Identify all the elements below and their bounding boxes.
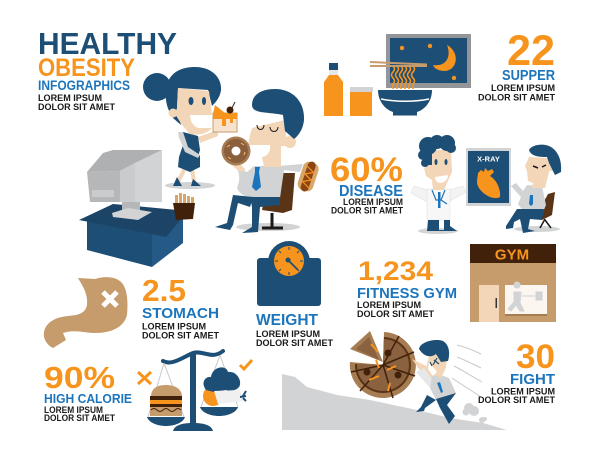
stat: supper: DOLOR SIT AMET bbox=[478, 92, 555, 104]
icon: pizza bbox=[350, 331, 416, 398]
stat: stomach: LOREM IPSUM bbox=[142, 322, 206, 332]
stat: fight: FIGHT bbox=[510, 371, 555, 388]
stat: weight: WEIGHT bbox=[256, 312, 319, 329]
stat: high calorie bbox=[44, 360, 132, 423]
stat: fight: 30 bbox=[516, 338, 555, 376]
x-ray panel bbox=[466, 148, 511, 206]
stat: supper bbox=[478, 27, 555, 104]
stat: disease: 60% bbox=[330, 151, 403, 189]
illustration: patient bbox=[506, 145, 561, 233]
icon: cake bbox=[213, 102, 237, 132]
icon: burger bbox=[150, 385, 182, 416]
stat: disease: DISEASE bbox=[339, 183, 403, 200]
stat: disease: LOREM IPSUM bbox=[343, 197, 403, 207]
stat: high calorie: HIGH CALORIE bbox=[44, 391, 132, 406]
icon: vegetables and fish bbox=[203, 367, 246, 406]
stat: fitness gym: DOLOR SIT AMET bbox=[357, 309, 434, 320]
stat: stomach bbox=[142, 273, 219, 342]
illustration: woman with cake bbox=[143, 67, 221, 189]
stat: stomach: 2.5 bbox=[142, 273, 186, 308]
speed lines bbox=[452, 345, 482, 397]
stat: stomach: STOMACH bbox=[142, 305, 219, 322]
icon: balance scale bbox=[138, 351, 252, 431]
stat: supper: 22 bbox=[507, 27, 555, 75]
stat: weight bbox=[256, 312, 333, 349]
title block: OBESITY bbox=[38, 54, 135, 82]
title block: LOREM IPSUM bbox=[38, 93, 102, 104]
stat: fitness gym: 1,234 bbox=[358, 256, 433, 286]
stat: supper: SUPPER bbox=[502, 67, 555, 84]
icon: gym building: GYM bbox=[495, 246, 529, 264]
stat: fitness gym: LOREM IPSUM bbox=[357, 300, 421, 311]
stat: weight: DOLOR SIT AMET bbox=[256, 338, 333, 349]
stat: high calorie: DOLOR SIT AMET bbox=[44, 413, 116, 423]
title block: DOLOR SIT AMET bbox=[38, 102, 115, 113]
x-ray panel: X-RAY bbox=[477, 154, 500, 164]
icon: gym building bbox=[470, 244, 556, 322]
icon: donut bbox=[222, 136, 250, 166]
stat: stomach: DOLOR SIT AMET bbox=[142, 330, 219, 342]
stat: fight bbox=[478, 338, 555, 406]
dust clouds bbox=[462, 403, 487, 423]
title block bbox=[38, 26, 177, 113]
stat: disease bbox=[330, 151, 403, 216]
stat: high calorie: LOREM IPSUM bbox=[44, 405, 103, 415]
icon: stomach bbox=[44, 277, 127, 348]
stat: fight: LOREM IPSUM bbox=[491, 386, 555, 398]
stat: fitness gym: FITNESS GYM bbox=[357, 285, 457, 302]
hill bbox=[282, 374, 507, 430]
stat: supper: LOREM IPSUM bbox=[491, 83, 555, 94]
supper illustration bbox=[324, 34, 471, 116]
stat: fitness gym bbox=[357, 256, 457, 320]
illustration: doctor bbox=[411, 135, 466, 234]
title block: HEALTHY bbox=[38, 26, 177, 61]
stat: fight: DOLOR SIT AMET bbox=[478, 395, 555, 406]
illustration: man eating donut bbox=[215, 89, 304, 233]
stat: high calorie: 90% bbox=[44, 360, 115, 395]
icon: hot dog bbox=[296, 159, 321, 194]
illustration: man pushing pizza bbox=[412, 340, 456, 424]
icon: weighing scale bbox=[257, 241, 321, 306]
stat: disease: DOLOR SIT AMET bbox=[331, 206, 403, 216]
title block: INFOGRAPHICS bbox=[38, 78, 130, 93]
illustration: computer desk bbox=[79, 150, 195, 267]
icon: heart bbox=[477, 168, 500, 198]
stat: weight: LOREM IPSUM bbox=[256, 329, 320, 340]
